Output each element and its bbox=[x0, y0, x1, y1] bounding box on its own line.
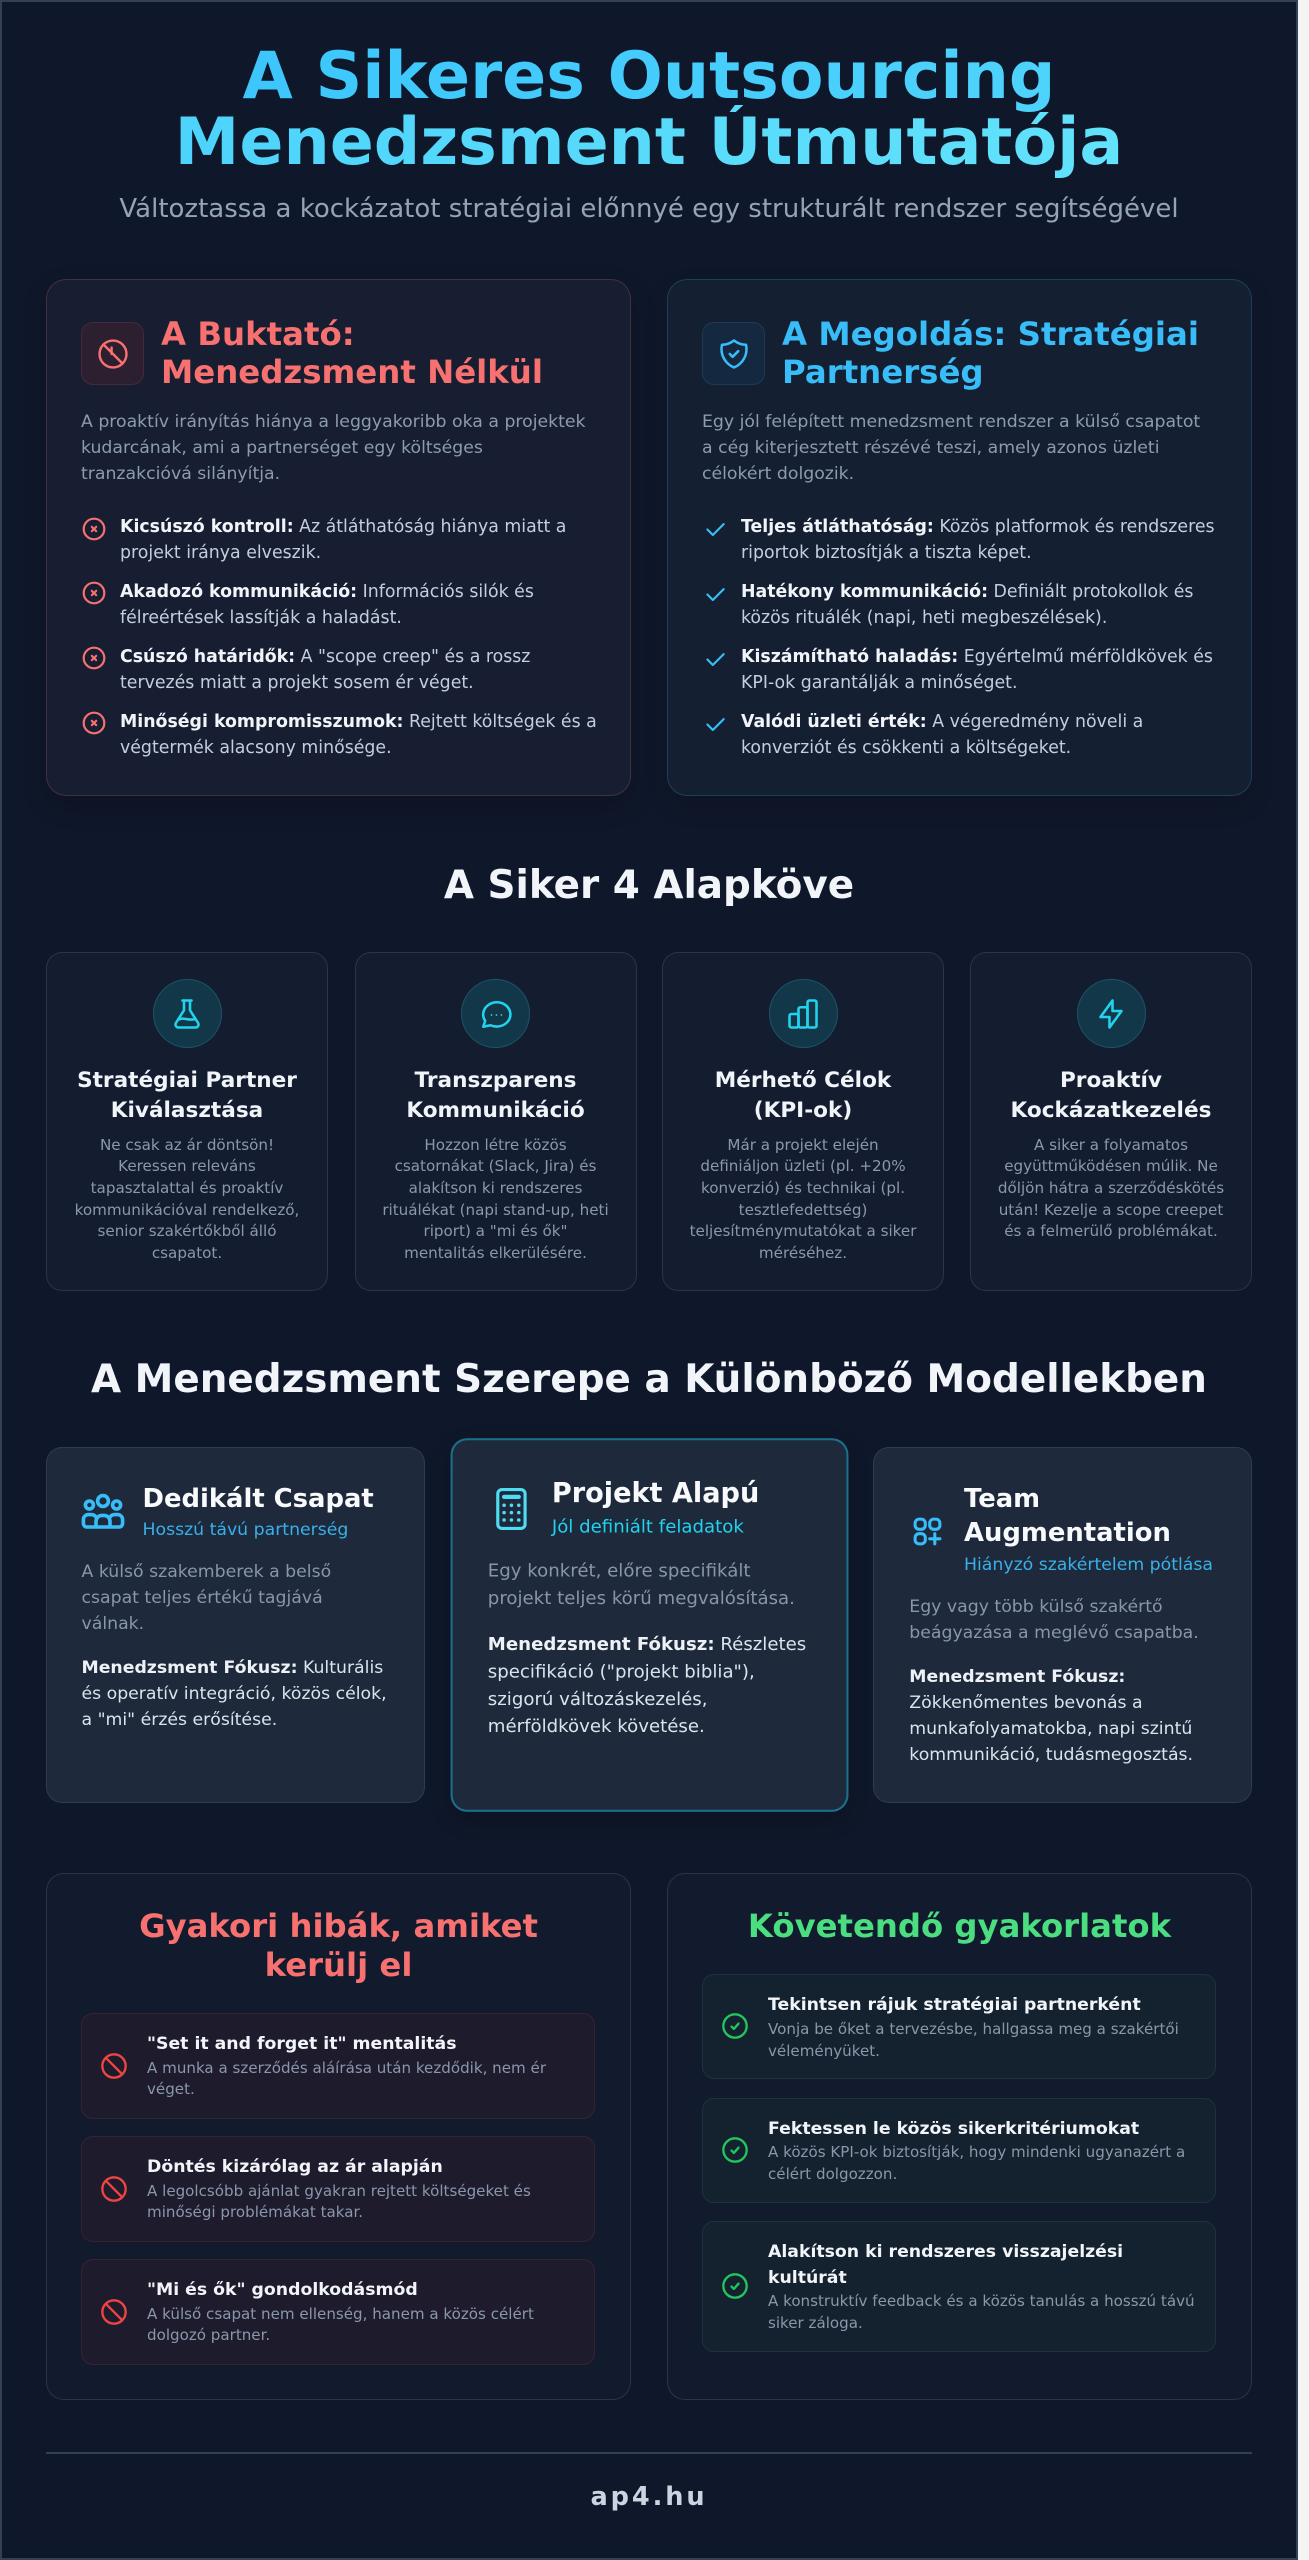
item text: véleményüket. bbox=[768, 2042, 880, 2060]
heading: models: A Menedzsment Szerepe a Különböző Modellekben bbox=[91, 1357, 1207, 1402]
icon: shield check bbox=[702, 322, 765, 385]
card subtitle: Hosszú távú partnerség bbox=[142, 1520, 348, 1540]
intro text: kudarcának, ami a partnerséget egy költséges bbox=[81, 438, 483, 458]
panel: common mistakes bbox=[46, 1873, 631, 2400]
title: Menedzsment Útmutatója bbox=[175, 105, 1123, 180]
card subtitle: Hiányzó szakértelem pótlása bbox=[964, 1555, 1213, 1575]
list item 4: végtermék alacsony minősége. bbox=[120, 738, 392, 758]
item text bbox=[147, 2304, 534, 2347]
subtitle: Változtassa a kockázatot stratégiai előnnyé egy strukturált rendszer segítségével bbox=[119, 194, 1179, 224]
description: válnak. bbox=[82, 1614, 144, 1634]
description: csapat teljes értékű tagjává bbox=[82, 1588, 323, 1608]
list item 3: KPI-ok garantálják a minőséget. bbox=[741, 672, 1018, 692]
pillar text: együttműködésen múlik. Ne bbox=[1004, 1157, 1218, 1175]
icon: ban bbox=[100, 2298, 128, 2326]
list item 4: Minőségi kompromisszumok: Rejtett költségek és a bbox=[120, 712, 597, 732]
list item 1 bbox=[741, 516, 1215, 562]
list item 1: Kicsúszó kontroll: Az átláthatóság hiánya miatt a bbox=[120, 516, 566, 536]
description: A külső szakemberek a belső bbox=[82, 1562, 331, 1582]
icon: flask bbox=[152, 979, 222, 1048]
card title bbox=[964, 1484, 1171, 1548]
list item 2: Hatékony kommunikáció: Definiált protokollok és bbox=[741, 582, 1193, 602]
pillar text: rituálékat (napi stand-up, heti bbox=[382, 1201, 609, 1219]
icon: check 3 bbox=[706, 653, 725, 666]
list item 1: Teljes átláthatóság: Közös platformok és rendszeres bbox=[741, 516, 1215, 536]
item text: Vonja be őket a tervezésbe, hallgassa meg a szakértői bbox=[768, 2020, 1179, 2038]
item text: véget. bbox=[147, 2080, 195, 2098]
list item 4: Valódi üzleti érték: A végeredmény növeli a bbox=[741, 712, 1143, 732]
mistake 3 bbox=[81, 2259, 595, 2364]
management focus: a "mi" érzés erősítése. bbox=[82, 1710, 277, 1730]
heading: A Buktató: bbox=[161, 314, 355, 352]
pillar title bbox=[715, 1068, 892, 1123]
panel: pillar 4 bbox=[970, 952, 1252, 1291]
card subtitle: Jól definiált feladatok bbox=[551, 1517, 743, 1538]
panel: dedicated team bbox=[46, 1447, 425, 1803]
panel: pillar 2 bbox=[354, 952, 636, 1291]
intro text bbox=[702, 412, 1200, 484]
pillar text: csatornákat (Slack, Jira) és bbox=[395, 1157, 596, 1175]
pillar text: alakítson ki rendszeres bbox=[409, 1179, 582, 1197]
panel: best practices bbox=[667, 1873, 1252, 2400]
icon: check circle bbox=[721, 2272, 749, 2300]
icon: check circle bbox=[721, 2136, 749, 2164]
title bbox=[175, 39, 1123, 180]
list item 1: projekt iránya elveszik. bbox=[120, 542, 321, 562]
panel: team augmentation bbox=[873, 1447, 1252, 1803]
pillar text: konverzió) és technikai (pl. bbox=[701, 1179, 905, 1197]
pillar text: Már a projekt elején bbox=[727, 1136, 879, 1154]
management focus: Zökkenőmentes bevonás a bbox=[909, 1693, 1143, 1713]
icon: bar chart bbox=[768, 979, 838, 1048]
item text bbox=[768, 2019, 1179, 2062]
item title: Fektessen le közös sikerkritériumokat bbox=[768, 2118, 1139, 2138]
item text bbox=[147, 2181, 531, 2224]
list item 2: félreértések lassítják a haladást. bbox=[120, 608, 402, 628]
list item 4 bbox=[741, 712, 1143, 758]
pillar text bbox=[382, 1136, 609, 1262]
pillar text: senior szakértőkből álló bbox=[97, 1222, 276, 1240]
card title: Dedikált Csapat bbox=[142, 1484, 374, 1514]
list item 2: Akadozó kommunikáció: Információs silók és bbox=[120, 582, 534, 602]
pillar text: kommunikációval rendelkező, bbox=[75, 1201, 299, 1219]
heading: kerülj el bbox=[265, 1946, 412, 1984]
intro text: célokért dolgozik. bbox=[702, 464, 854, 484]
management focus: és operatív integráció, közös célok, bbox=[82, 1684, 387, 1704]
icon: check 1 bbox=[706, 523, 725, 536]
pillar text: tapasztalattal és proaktív bbox=[91, 1179, 283, 1197]
management focus: munkafolyamatokba, napi szintű bbox=[909, 1719, 1192, 1739]
management focus: Menedzsment Fókusz: bbox=[909, 1667, 1125, 1687]
list item 4 bbox=[120, 712, 597, 758]
pillar text: tesztlefedettség) bbox=[739, 1201, 867, 1219]
icon: users group bbox=[82, 1494, 124, 1529]
panel: the solution bbox=[667, 279, 1252, 796]
panel: pillar 1 bbox=[46, 952, 328, 1291]
intro text: tranzakcióvá silányítja. bbox=[81, 464, 280, 484]
pillar text: dőljön hátra a szerződéskötés bbox=[998, 1179, 1224, 1197]
pillar text: és a felmerülő problémákat. bbox=[1004, 1222, 1218, 1240]
heading: Követendő gyakorlatok bbox=[748, 1907, 1171, 1945]
practice 1 bbox=[702, 1974, 1216, 2079]
item title: kultúrát bbox=[768, 2268, 847, 2288]
icon: check 2 bbox=[706, 588, 725, 602]
title: A Sikeres Outsourcing bbox=[243, 39, 1055, 114]
item text: A külső csapat nem ellenség, hanem a közös célért bbox=[147, 2305, 534, 2323]
management focus bbox=[82, 1658, 387, 1730]
pillar title: Transzparens bbox=[415, 1068, 576, 1093]
icon: ban bbox=[100, 2052, 128, 2080]
list item 1: riportok biztosítják a tiszta képet. bbox=[741, 542, 1032, 562]
pillar text: Keressen releváns bbox=[118, 1157, 256, 1175]
management focus bbox=[487, 1634, 806, 1737]
heading bbox=[161, 314, 543, 391]
pillar title: Kiválasztása bbox=[111, 1098, 263, 1123]
panel: pillar 3 bbox=[662, 952, 944, 1291]
pillar title: (KPI-ok) bbox=[754, 1098, 852, 1123]
description: beágyazása a meglévő csapatba. bbox=[909, 1623, 1199, 1643]
pillar title bbox=[77, 1068, 297, 1123]
pillar text bbox=[998, 1136, 1224, 1240]
mistake 2 bbox=[81, 2136, 595, 2242]
item text bbox=[768, 2291, 1195, 2334]
icon: calculator bbox=[496, 1488, 527, 1530]
intro text: a cég kiterjesztett részévé teszi, amely azonos üzleti bbox=[702, 438, 1160, 458]
icon: chat bubble bbox=[461, 979, 530, 1048]
panel: the pitfall bbox=[46, 279, 631, 796]
description bbox=[487, 1561, 794, 1609]
management focus: mérföldkövek követése. bbox=[487, 1716, 704, 1737]
intro text bbox=[81, 412, 586, 484]
heading: A Megoldás: Stratégiai bbox=[782, 314, 1199, 352]
practice 3 bbox=[702, 2221, 1216, 2352]
intro text: Egy jól felépített menedzsment rendszer a külső csapatot bbox=[702, 412, 1200, 432]
management focus: kommunikáció, tudásmegosztás. bbox=[909, 1745, 1193, 1765]
description: Egy vagy több külső szakértő bbox=[909, 1597, 1163, 1617]
pillar text: definiáljon üzleti (pl. +20% bbox=[700, 1157, 906, 1175]
icon: check circle bbox=[721, 2012, 749, 2040]
heading: four pillars: A Siker 4 Alapköve bbox=[444, 863, 854, 908]
list item 3: tervezés miatt a projekt sosem ér véget. bbox=[120, 672, 474, 692]
management focus: Menedzsment Fókusz: Részletes bbox=[487, 1634, 806, 1655]
description: projekt teljes körű megvalósítása. bbox=[487, 1588, 794, 1609]
management focus bbox=[909, 1667, 1193, 1765]
list item 4: konverziót és csökkenti a költségeket. bbox=[741, 738, 1071, 758]
management focus: Menedzsment Fókusz: Kulturális bbox=[82, 1658, 383, 1678]
list item 3: Kiszámítható haladás: Egyértelmű mérföldkövek és bbox=[741, 646, 1213, 666]
description bbox=[82, 1562, 331, 1634]
icon: x circle 3 bbox=[82, 646, 106, 670]
pillar text: A siker a folyamatos bbox=[1034, 1136, 1188, 1154]
pillar title bbox=[406, 1068, 585, 1123]
list item 1 bbox=[120, 516, 566, 562]
icon: ban bbox=[100, 2175, 128, 2203]
icon: x circle 4 bbox=[82, 712, 106, 734]
description: Egy konkrét, előre specifikált bbox=[487, 1561, 750, 1582]
item title: Alakítson ki rendszeres visszajelzési bbox=[768, 2242, 1123, 2262]
list item 3: Csúszó határidők: A "scope creep" és a rossz bbox=[120, 646, 530, 666]
heading: Partnerség bbox=[782, 353, 984, 391]
pillar text: mentalitás elkerülésére. bbox=[404, 1244, 587, 1262]
list item 2 bbox=[741, 582, 1193, 628]
pillar text: csapatot. bbox=[152, 1244, 222, 1262]
item title: Tekintsen rájuk stratégiai partnerként bbox=[768, 1995, 1141, 2015]
pillar text: teljesítménymutatókat a siker bbox=[690, 1222, 916, 1240]
item text: dolgozó partner. bbox=[147, 2326, 270, 2344]
icon: ban bbox=[81, 322, 144, 385]
list item 3 bbox=[120, 646, 530, 692]
icon: apps plus bbox=[914, 1518, 942, 1546]
heading bbox=[139, 1907, 538, 1984]
item text bbox=[147, 2058, 546, 2101]
pillar text bbox=[75, 1136, 299, 1262]
icon: x circle 1 bbox=[82, 518, 106, 540]
pillar text: Ne csak az ár döntsön! bbox=[100, 1136, 274, 1154]
pillar title: Kommunikáció bbox=[406, 1098, 585, 1123]
management focus: specifikáció ("projekt biblia"), bbox=[487, 1661, 754, 1682]
pillar text: riport) a "mi és ők" bbox=[423, 1222, 568, 1240]
card title: Team bbox=[964, 1484, 1040, 1514]
description bbox=[909, 1597, 1199, 1643]
item text: A munka a szerződés aláírása után kezdődik, nem ér bbox=[147, 2059, 546, 2077]
footer brand: ap4.hu bbox=[591, 2482, 707, 2512]
card title: Augmentation bbox=[964, 1518, 1171, 1548]
pillar text: után! Kezelje a scope creepet bbox=[999, 1201, 1223, 1219]
panel: project based (highlighted) bbox=[450, 1438, 848, 1812]
icon: check 4 bbox=[706, 718, 725, 732]
pillar title: Mérhető Célok bbox=[715, 1068, 891, 1093]
intro text: A proaktív irányítás hiánya a leggyakoribb oka a projektek bbox=[81, 412, 586, 432]
item title: "Set it and forget it" mentalitás bbox=[147, 2034, 456, 2054]
item text bbox=[768, 2142, 1185, 2186]
heading bbox=[782, 314, 1199, 391]
practice 2 bbox=[702, 2098, 1216, 2202]
item title: Döntés kizárólag az ár alapján bbox=[147, 2157, 443, 2177]
item text: A közös KPI-ok biztosítják, hogy mindenki ugyanazért a bbox=[768, 2143, 1185, 2161]
mistake 1 bbox=[81, 2013, 595, 2118]
item text: minőségi problémákat takar. bbox=[147, 2203, 363, 2221]
list item 2 bbox=[120, 582, 534, 628]
heading: Gyakori hibák, amiket bbox=[139, 1907, 538, 1945]
pillar title: Stratégiai Partner bbox=[77, 1068, 297, 1093]
pillar text bbox=[690, 1136, 916, 1262]
heading: Menedzsment Nélkül bbox=[161, 353, 543, 391]
list item 2: közös rituálék (napi, heti megbeszélések). bbox=[741, 608, 1107, 628]
pillar text: méréséhez. bbox=[759, 1244, 847, 1262]
item title: "Mi és ők" gondolkodásmód bbox=[147, 2280, 418, 2300]
pillar title: Proaktív bbox=[1060, 1068, 1162, 1093]
pillar text: Hozzon létre közös bbox=[424, 1136, 567, 1154]
item text: célért dolgozzon. bbox=[768, 2165, 897, 2183]
card title: Projekt Alapú bbox=[551, 1478, 759, 1510]
item text: A legolcsóbb ajánlat gyakran rejtett költségeket és bbox=[147, 2182, 531, 2200]
icon: lightning bolt bbox=[1076, 979, 1146, 1048]
item title bbox=[768, 2239, 1123, 2291]
management focus: szigorú változáskezelés, bbox=[487, 1689, 707, 1710]
pillar title: Kockázatkezelés bbox=[1011, 1098, 1211, 1123]
item text: A konstruktív feedback és a közös tanulás a hosszú távú bbox=[768, 2292, 1195, 2310]
list item 3 bbox=[741, 646, 1213, 692]
item text: siker záloga. bbox=[768, 2314, 863, 2332]
pillar title bbox=[1011, 1068, 1211, 1123]
icon: x circle 2 bbox=[82, 582, 106, 604]
